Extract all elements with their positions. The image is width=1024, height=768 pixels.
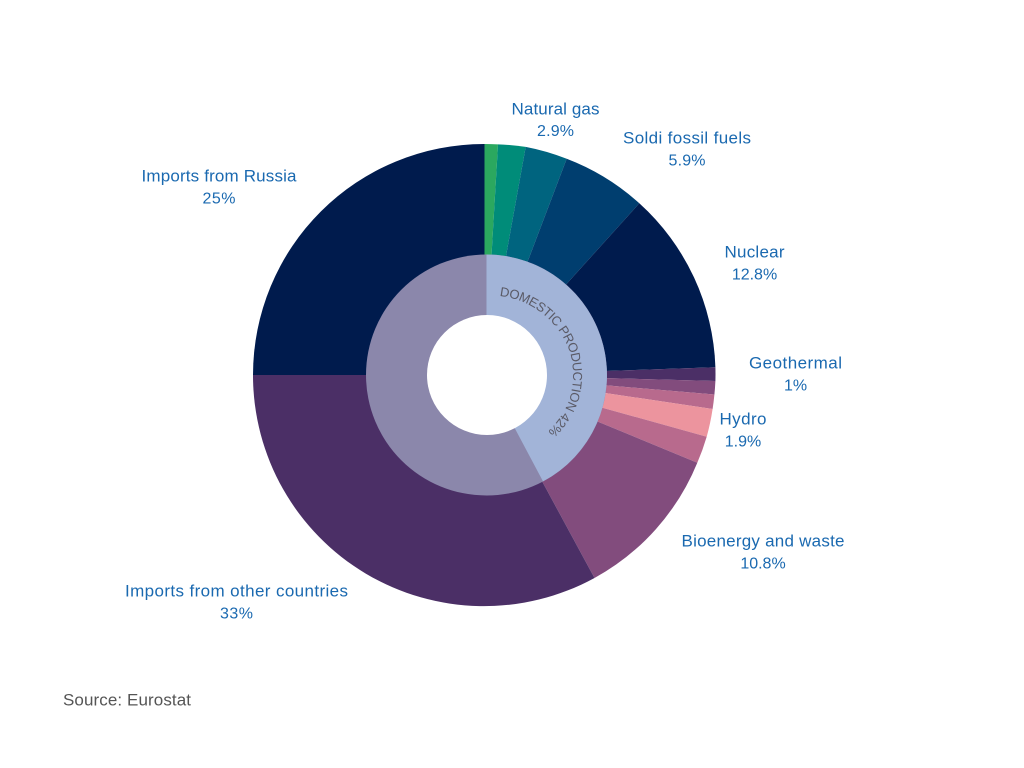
label: imports from Russia: 25% xyxy=(202,190,236,208)
label: imports from Russia: Imports from Russia xyxy=(142,166,297,186)
centre hole xyxy=(427,315,547,435)
label: natural gas: Natural gas xyxy=(512,100,600,118)
source note: Source: Eurostat xyxy=(63,690,191,710)
inner ring: domestic production share xyxy=(486,254,607,481)
segment: natural gas 2.9% xyxy=(484,147,567,375)
label: solid fossil fuels: 5.9% xyxy=(668,152,706,170)
label: imports from other countries: Imports from other countries xyxy=(125,582,348,600)
segment: natural gas slice xyxy=(484,144,526,375)
label: imports from other countries xyxy=(125,582,348,622)
label: natural gas: 2.9% xyxy=(537,123,574,140)
outer ring: energy sources xyxy=(253,144,716,606)
label: hydro: Hydro xyxy=(720,410,766,428)
label: nuclear: 12.8% xyxy=(732,266,777,284)
segment: nuclear 12.8% xyxy=(484,203,715,375)
label: hydro: 1.9% xyxy=(725,434,761,450)
segment: geothermal 1% xyxy=(484,367,716,381)
segment: green fossil slice xyxy=(484,144,498,375)
label: solid fossil fuels: Soldi fossil fuels xyxy=(623,128,751,148)
label: bioenergy and waste xyxy=(682,532,844,572)
inner ring: imports share xyxy=(366,254,607,496)
label: bioenergy and waste: Bioenergy and waste xyxy=(682,532,844,550)
label: hydro xyxy=(720,410,766,450)
segment: imports from other countries 33% xyxy=(253,375,594,606)
segment: bioenergy and waste 10.8% xyxy=(484,375,697,578)
label: solid fossil fuels xyxy=(623,128,751,170)
segment: mauve slice xyxy=(484,375,714,409)
label: natural gas xyxy=(512,100,600,140)
segment: solid fossil fuels 5.9% xyxy=(484,159,639,375)
segment: purple slice xyxy=(484,375,715,394)
label: bioenergy and waste: 10.8% xyxy=(740,556,786,572)
segment: imports from Russia xyxy=(253,144,484,375)
segment: mauve slice lower xyxy=(484,375,707,463)
label: geothermal: Geothermal xyxy=(749,354,842,372)
label: imports from Russia xyxy=(142,166,297,208)
label: geothermal: 1% xyxy=(784,378,807,394)
curved label: domestic production: DOMESTIC PRODUCTION 42% xyxy=(500,287,582,436)
label: imports from other countries: 33% xyxy=(220,606,253,622)
label: nuclear xyxy=(724,242,785,284)
segment: hydro 1.9% xyxy=(484,375,713,437)
label: geothermal xyxy=(749,354,842,394)
label: nuclear: Nuclear xyxy=(724,242,785,262)
donut chart xyxy=(253,144,716,606)
